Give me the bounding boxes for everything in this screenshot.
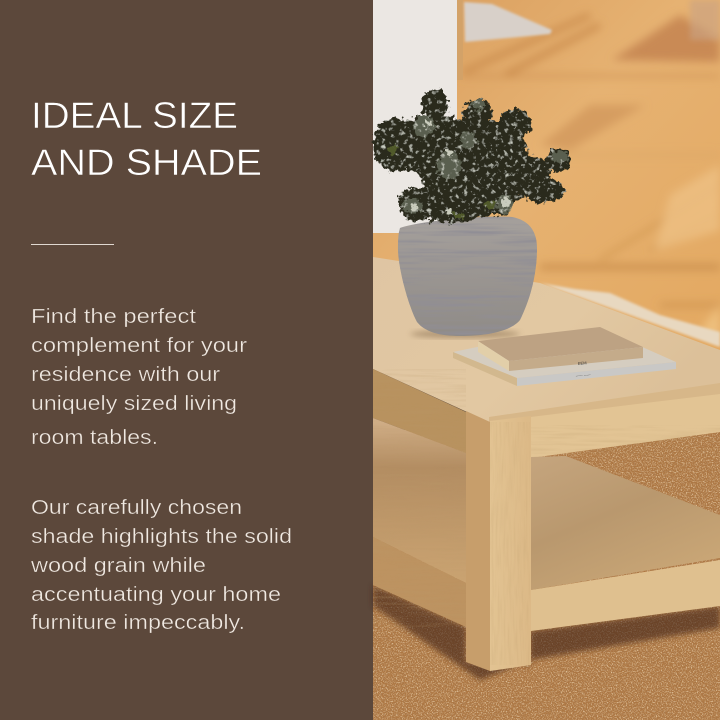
left apron xyxy=(373,369,466,453)
photo: living room table scene xyxy=(373,0,720,720)
text block: first paragraph: complement for your xyxy=(31,334,247,357)
vase xyxy=(395,215,540,338)
text block: first paragraph xyxy=(31,305,247,449)
panel: brown text panel xyxy=(0,0,373,720)
lower shelf right xyxy=(531,456,720,590)
text block: first paragraph: room tables. xyxy=(31,426,158,449)
distant rug xyxy=(464,2,552,42)
title: AND SHADE xyxy=(31,142,262,183)
right apron xyxy=(531,392,720,458)
text block: first paragraph: uniquely sized living xyxy=(31,392,237,415)
lower apron left xyxy=(373,537,466,627)
carpet xyxy=(373,430,720,720)
text block: second paragraph: Our carefully chosen xyxy=(31,496,242,519)
title xyxy=(31,95,262,183)
top front edge xyxy=(489,383,720,422)
text block: first paragraph: Find the perfect xyxy=(31,305,196,328)
title: IDEAL SIZE xyxy=(31,95,238,136)
icon: plant foliage xyxy=(373,90,571,223)
wood grain xyxy=(373,369,720,665)
parquet floor background xyxy=(373,0,720,360)
lower shelf left xyxy=(373,418,466,583)
text block: second paragraph: wood grain while xyxy=(30,554,206,577)
lower book: —— —— xyxy=(576,373,592,378)
lower book xyxy=(453,346,676,386)
upper book: EEM xyxy=(578,360,587,366)
text block: second paragraph xyxy=(30,496,292,634)
text block: first paragraph: residence with our xyxy=(31,363,220,386)
text block: second paragraph: accentuating your home xyxy=(31,583,281,606)
upper book xyxy=(478,327,643,371)
text block: second paragraph: furniture impeccably. xyxy=(31,611,245,634)
shaggy rug edge xyxy=(540,283,720,347)
lower apron right xyxy=(531,560,720,631)
white wall xyxy=(373,0,463,233)
text block: second paragraph: shade highlights the solid xyxy=(31,525,292,548)
table xyxy=(373,257,720,671)
table top xyxy=(373,257,720,422)
divider line xyxy=(31,244,114,245)
leg xyxy=(466,411,531,671)
books xyxy=(453,327,676,386)
